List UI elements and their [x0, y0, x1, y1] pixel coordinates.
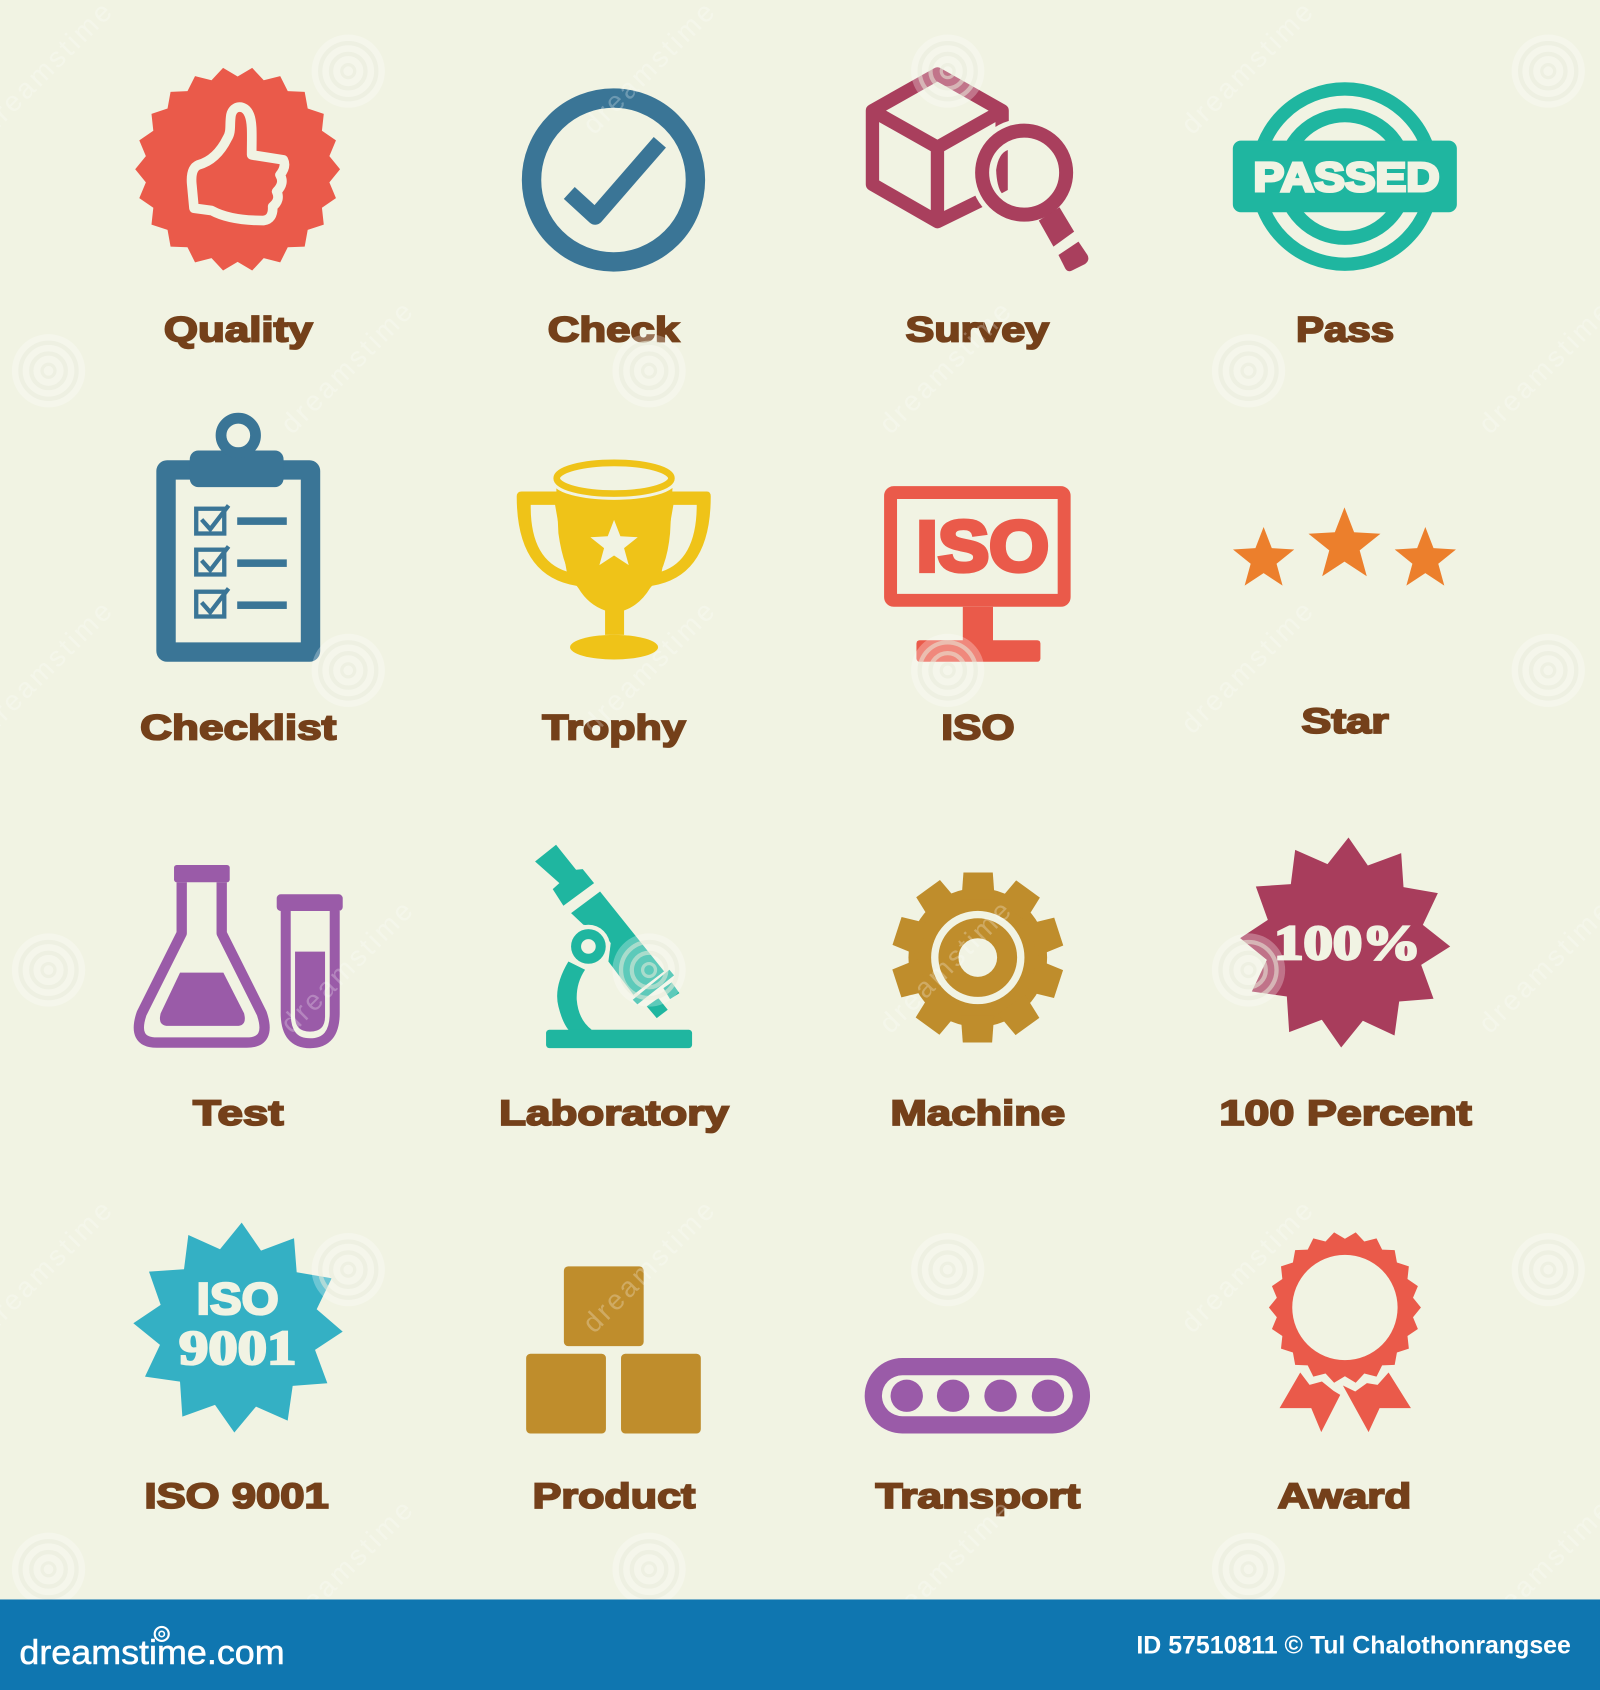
watermark pattern: dreamstime [275, 1494, 418, 1638]
watermark pattern: dreamstime [873, 1494, 1017, 1638]
label: 100 Percent: 100 Percent [1219, 1093, 1472, 1133]
icon: award rosette [1269, 1232, 1421, 1432]
label: Award: Award [1278, 1476, 1411, 1516]
icon: transport conveyor [865, 1358, 1090, 1433]
footer bar [0, 1599, 1600, 1690]
watermark pattern: dreamstime [1175, 595, 1319, 739]
icon: ISO 9001 burst: 9001 [179, 1321, 296, 1375]
watermark pattern: dreamstime [1175, 0, 1319, 140]
icon: ISO 9001 burst [133, 1223, 343, 1433]
label: Test: Test [193, 1093, 284, 1133]
watermark pattern: dreamstime [275, 895, 418, 1039]
icon: passed stamp: PASSED [1253, 154, 1440, 200]
watermark pattern: dreamstime [576, 595, 720, 739]
icon: trophy [517, 463, 711, 659]
icon: 100 percent burst: 100% [1274, 916, 1421, 970]
icon: 100 percent burst [1240, 838, 1450, 1047]
watermark pattern: dreamstime [576, 1195, 720, 1339]
watermark pattern: dreamstime [1175, 1195, 1319, 1339]
icon: ISO monitor [891, 493, 1064, 662]
watermark pattern: dreamstime [275, 296, 418, 440]
icon: product boxes [526, 1266, 701, 1433]
label: Transport: Transport [875, 1476, 1081, 1516]
label: Star: Star [1301, 701, 1389, 741]
label: Quality: Quality [164, 310, 313, 350]
label: Checklist: Checklist [140, 707, 337, 747]
icon: ISO monitor: ISO [916, 508, 1049, 587]
label: Trophy: Trophy [542, 707, 686, 747]
icon: three stars [1233, 507, 1456, 586]
label: Machine: Machine [891, 1093, 1065, 1133]
footer credit: ID 57510811 © Tul Chalothonrangsee [1136, 1632, 1571, 1659]
label: ISO 9001: ISO 9001 [144, 1476, 329, 1516]
label: Survey: Survey [906, 310, 1049, 350]
icon: quality thumbs-up badge [135, 68, 340, 271]
watermark pattern: dreamstime [873, 296, 1017, 440]
icon: survey box and magnifier [872, 74, 1088, 271]
label: Product: Product [533, 1476, 696, 1516]
watermark pattern: dreamstime [873, 895, 1017, 1039]
label: ISO: ISO [941, 707, 1015, 747]
label: Laboratory: Laboratory [499, 1093, 729, 1133]
icon: machine gear [892, 873, 1064, 1042]
label: Pass: Pass [1296, 310, 1394, 350]
icon: passed stamp [1233, 89, 1457, 264]
footer logo: dreamstime.com: dreamstime.com [19, 1634, 285, 1672]
icon: ISO 9001 burst: ISO [197, 1275, 279, 1324]
icon: microscope [535, 845, 692, 1048]
label: Check: Check [548, 310, 680, 350]
icon: check circle [532, 98, 695, 262]
icon: test flask and tube [139, 865, 343, 1043]
icon: checklist clipboard [156, 418, 320, 662]
watermark pattern: dreamstime [576, 0, 720, 140]
